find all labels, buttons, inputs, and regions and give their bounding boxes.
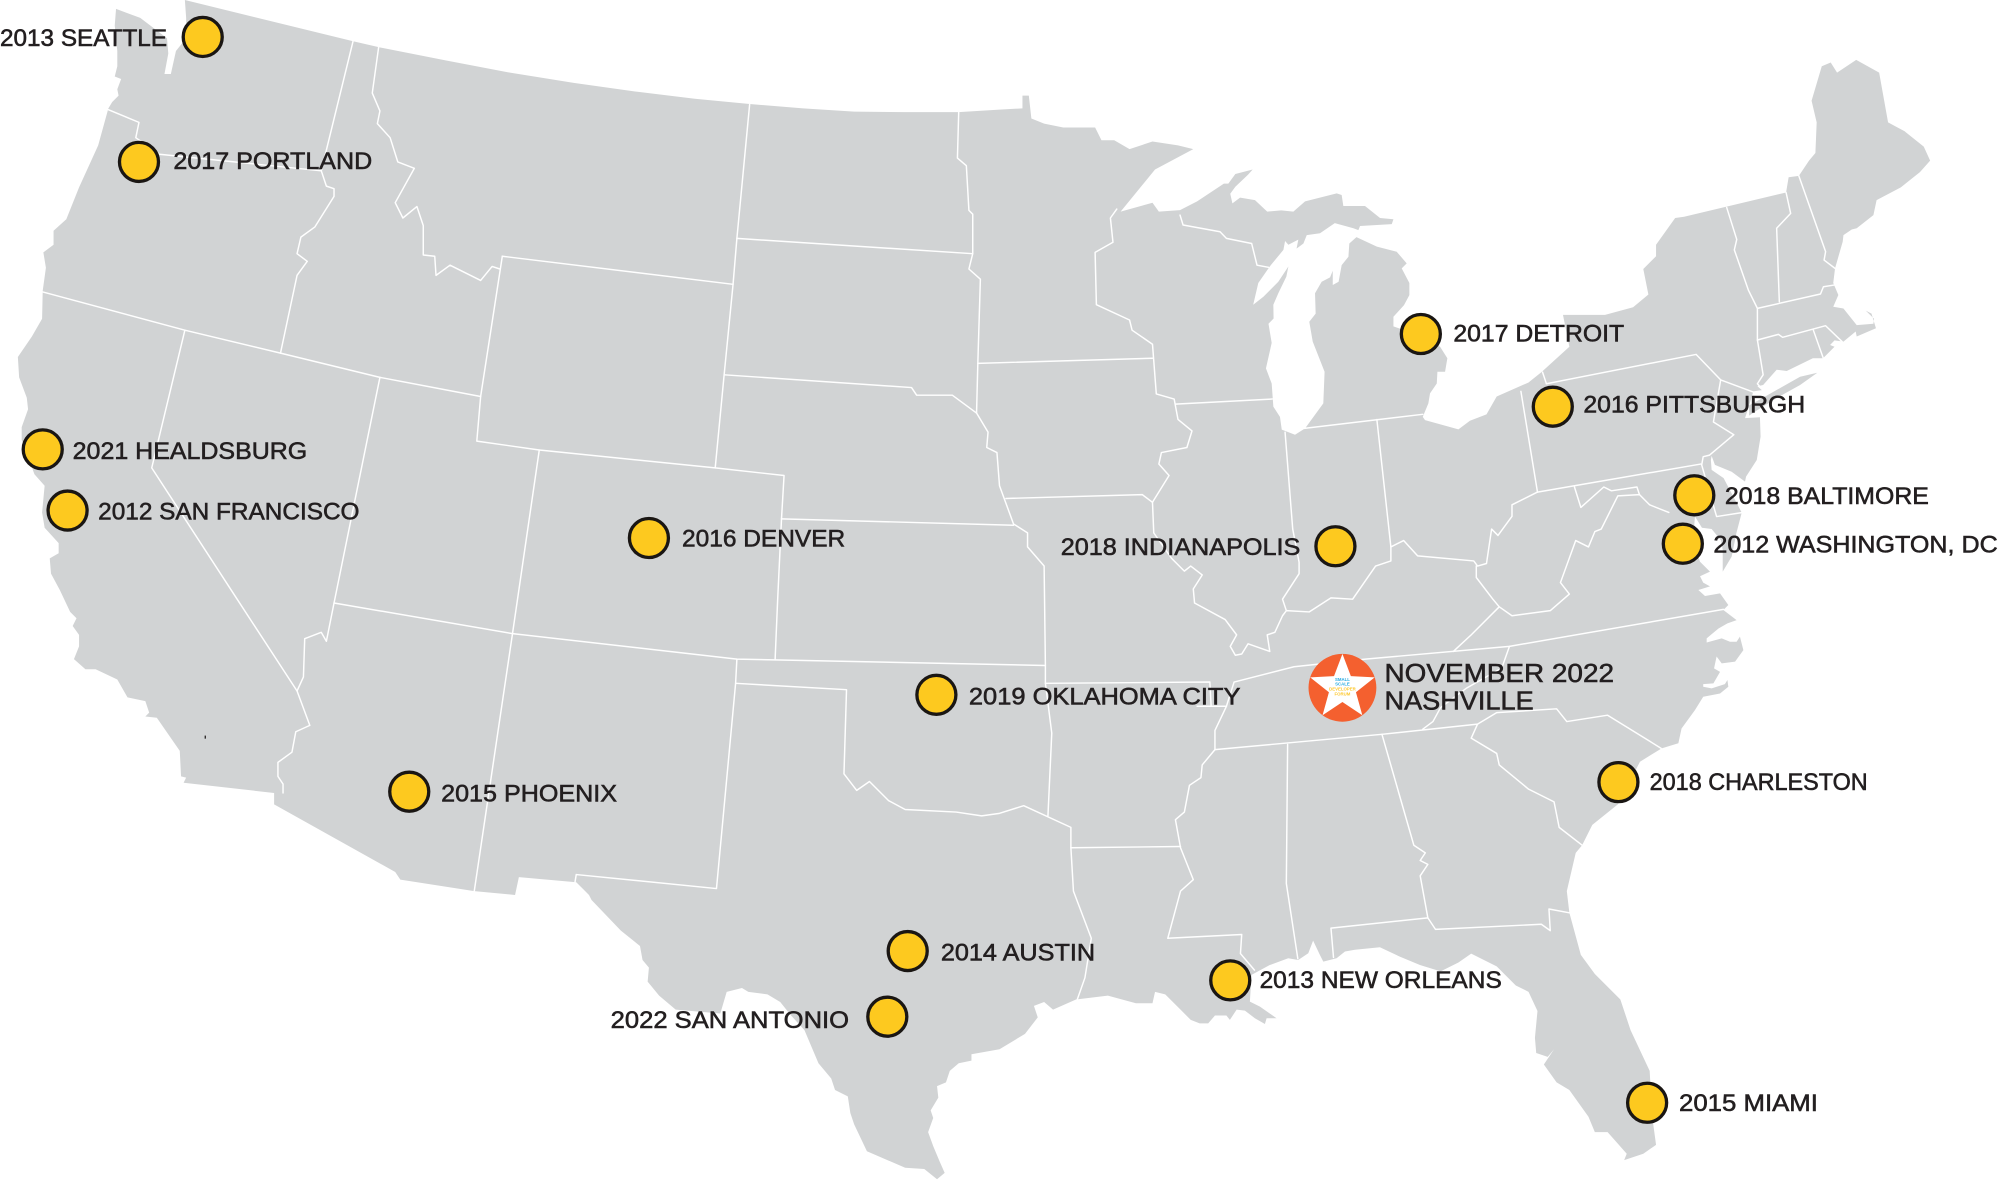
badge: Small Scale Developer Forum star [1309,654,1376,722]
marker: 2013 New Orleans [1211,961,1502,1000]
marker: 2021 Healdsburg [23,430,307,469]
badge: Small Scale Developer Forum star: DEVELOPER [1329,687,1357,692]
badge: Small Scale Developer Forum star: SCALE [1335,682,1350,687]
label: November 2022 Nashville [1385,658,1614,716]
marker: 2012 San Francisco [48,491,360,530]
marker: 2017 Portland [119,142,372,181]
badge: Small Scale Developer Forum star: SMALL [1335,677,1350,682]
marker: 2015 Phoenix: 2015 PHOENIX [441,781,617,807]
marker: 2015 Phoenix [390,772,617,811]
marker: 2022 San Antonio [611,997,907,1036]
label: November 2022 Nashville: NASHVILLE [1385,686,1534,716]
marker: 2018 Baltimore [1675,476,1929,515]
label: November 2022 Nashville: NOVEMBER 2022 [1385,658,1614,688]
marker: 2017 Detroit [1401,315,1624,354]
marker: 2013 Seattle [0,17,222,56]
marker: 2014 Austin: 2014 AUSTIN [941,940,1095,966]
marker: 2014 Austin [888,932,1095,971]
state borders [43,41,1842,999]
marker: 2012 San Francisco: 2012 SAN FRANCISCO [98,500,360,526]
marker: 2018 Indianapolis [1061,527,1355,566]
badge: Small Scale Developer Forum star: FORUM [1334,691,1351,696]
marker: 2018 Indianapolis: 2018 INDIANAPOLIS [1061,535,1300,561]
marker: 2019 Oklahoma City: 2019 OKLAHOMA CITY [969,685,1241,711]
marker: 2018 Baltimore: 2018 BALTIMORE [1725,484,1929,510]
marker: 2016 Pittsburgh [1533,387,1805,426]
small dark speck [205,736,206,739]
marker: 2013 New Orleans: 2013 NEW ORLEANS [1260,968,1502,994]
marker: 2012 Washington, DC [1663,524,1998,563]
marker: 2018 Charleston [1599,763,1868,802]
marker: 2013 Seattle: 2013 SEATTLE [0,26,167,52]
marker: 2019 Oklahoma City [917,675,1241,714]
marker: 2016 Denver [629,518,845,557]
marker: 2017 Detroit: 2017 DETROIT [1453,322,1624,348]
marker: 2022 San Antonio: 2022 SAN ANTONIO [611,1008,849,1034]
marker: 2015 Miami: 2015 MIAMI [1679,1091,1818,1117]
marker: 2021 Healdsburg: 2021 HEALDSBURG [73,439,307,465]
marker: 2018 Charleston: 2018 CHARLESTON [1650,770,1868,796]
marker: 2012 Washington, DC: 2012 WASHINGTON, DC [1713,532,1998,558]
marker: 2017 Portland: 2017 PORTLAND [173,149,372,175]
marker: 2015 Miami [1628,1083,1818,1122]
marker: 2016 Denver: 2016 DENVER [682,527,845,553]
marker: 2016 Pittsburgh: 2016 PITTSBURGH [1583,392,1805,418]
